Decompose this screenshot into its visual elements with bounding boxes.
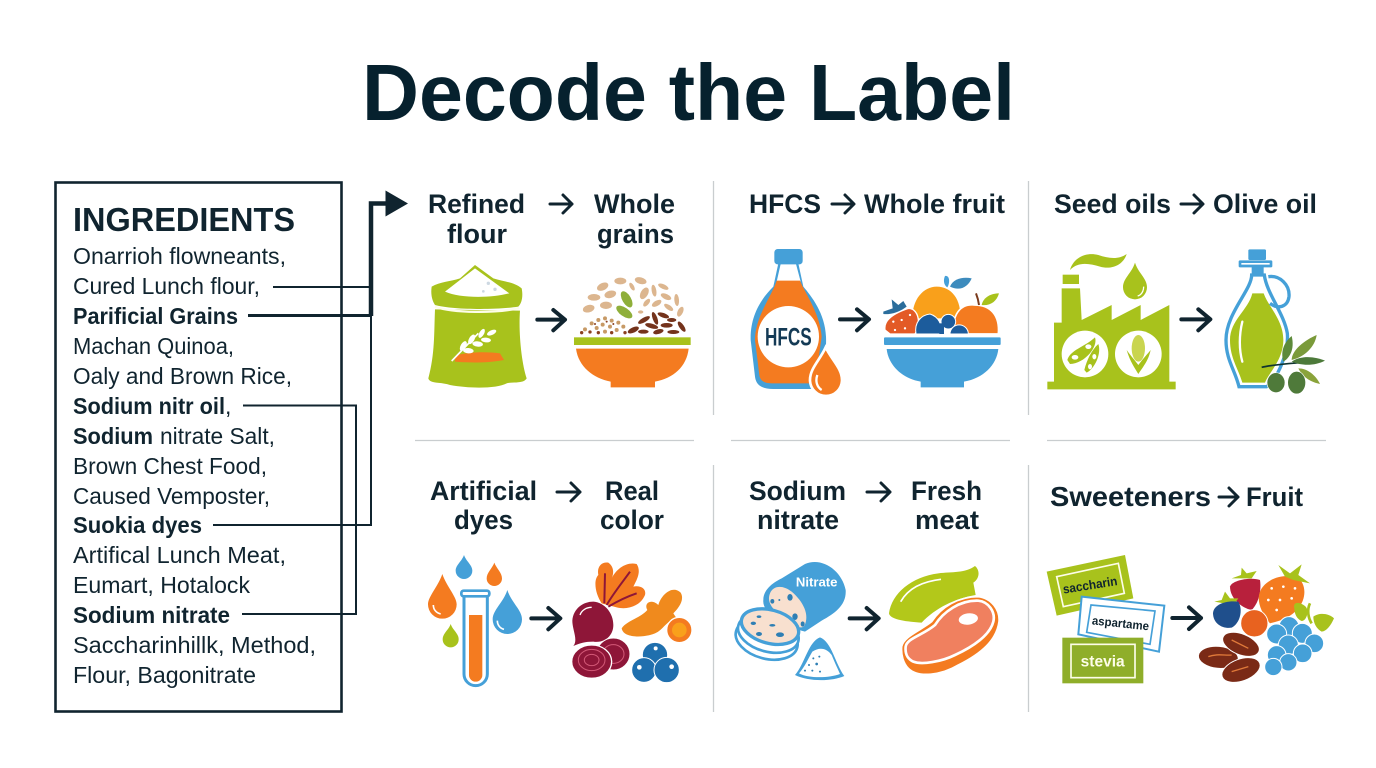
- icons: cured meat, arrow, fresh meat: [731, 562, 999, 680]
- panel: sodium nitrate to fresh meat: [731, 476, 999, 680]
- heading: refined flour to whole grains: [428, 189, 675, 249]
- heading: seed oils to olive oil: Seed oils: [1054, 189, 1171, 219]
- icons: test tube, arrow, natural colors: [428, 555, 692, 686]
- panel: artificial dyes to real color: [428, 476, 692, 686]
- text block: ingredient lines: Sodium nitr oil: [73, 393, 225, 419]
- icon: saccharin packet: [1047, 555, 1133, 616]
- text block: ingredient lines: Machan Quinoa,: [73, 333, 234, 359]
- icon: saccharin packet: saccharin: [1062, 574, 1118, 597]
- arrow: [537, 310, 565, 330]
- text block: ingredient lines: Brown Chest Food,: [73, 453, 267, 479]
- icons: sweetener packets, arrow, fruit pile: [1047, 555, 1334, 687]
- heading: sweeteners to fruit: Fruit: [1246, 482, 1303, 512]
- text block: ingredient lines: Onarrioh flowneants,: [73, 243, 286, 269]
- heading: artificial dyes to real color: color: [600, 505, 664, 535]
- text block: ingredient lines: ,: [225, 393, 231, 419]
- heading: HFCS to whole fruit: Whole fruit: [864, 189, 1005, 219]
- text block: ingredient lines: Sodium: [73, 423, 153, 449]
- panel: HFCS to whole fruit: [749, 189, 1005, 396]
- heading: artificial dyes to real color: [430, 476, 664, 535]
- icon: nitrate cured meat: Nitrate: [796, 576, 837, 590]
- connector lines and arrow from ingredients to swaps: [213, 190, 408, 614]
- text block: ingredient lines: Flour, Bagonitrate: [73, 662, 256, 688]
- icon: stevia packet: [1062, 638, 1143, 683]
- heading: artificial dyes to real color: Real: [605, 476, 659, 506]
- arrow: [840, 309, 869, 330]
- icon: beet, turmeric, blueberries: [572, 563, 692, 683]
- text block: ingredient lines: Parificial Grains: [73, 303, 238, 329]
- heading: sodium nitrate to fresh meat: nitrate: [757, 505, 839, 535]
- icon: aspartame packet: [1078, 597, 1164, 652]
- icon: HFCS syrup bottle: [751, 249, 842, 396]
- arrow: [1181, 309, 1210, 330]
- icon: stevia packet: stevia: [1081, 653, 1125, 670]
- heading: HFCS to whole fruit: [749, 189, 1005, 219]
- panel: refined flour to whole grains: [428, 189, 691, 388]
- heading: sodium nitrate to fresh meat: meat: [915, 505, 979, 535]
- icons: HFCS bottle, arrow, fruit bowl: [751, 249, 1001, 396]
- heading: seed oils to olive oil: [1054, 189, 1317, 219]
- icon: HFCS syrup bottle: HFCS: [765, 323, 812, 351]
- heading: refined flour to whole grains: Refined: [428, 189, 525, 219]
- heading: seed oils to olive oil: Olive oil: [1213, 189, 1317, 219]
- text block: ingredient lines: [73, 243, 316, 688]
- text block: ingredient lines: Sodium nitrate: [73, 602, 230, 628]
- heading: ingredients: INGREDIENTS: [73, 202, 295, 239]
- icon: fruit pile: [1197, 564, 1334, 687]
- heading: artificial dyes to real color: dyes: [454, 505, 513, 535]
- heading: refined flour to whole grains: grains: [597, 219, 674, 249]
- heading: artificial dyes to real color: Artificial: [430, 476, 537, 506]
- title: Decode the Label: [362, 48, 1015, 137]
- heading: sodium nitrate to fresh meat: [749, 476, 982, 535]
- panel: ingredients list: [56, 182, 342, 712]
- icon: nitrate cured meat: [731, 562, 846, 680]
- text block: ingredient lines: Cured Lunch flour,: [73, 273, 260, 299]
- panel: sweeteners to fruit: [1047, 481, 1334, 687]
- heading: HFCS to whole fruit: HFCS: [749, 189, 821, 219]
- text block: ingredient lines: Eumart, Hotalock: [73, 572, 250, 598]
- icon: aspartame packet: aspartame: [1091, 613, 1150, 633]
- arrow: [531, 608, 560, 629]
- icon: test tube with dye drops: [428, 555, 522, 686]
- icon: bowl of fruit: [883, 276, 1001, 387]
- text block: ingredient lines: Caused Vemposter,: [73, 483, 270, 509]
- heading: sweeteners to fruit: [1050, 481, 1303, 512]
- heading: sweeteners to fruit: Sweeteners: [1050, 481, 1211, 512]
- icon: olive oil jar: [1226, 249, 1325, 394]
- arrow: [1172, 607, 1201, 629]
- icons: factory, arrow, olive oil: [1047, 249, 1325, 394]
- text block: ingredient lines: Oaly and Brown Rice,: [73, 363, 292, 389]
- icon: seed oil factory: [1047, 254, 1176, 389]
- heading: refined flour to whole grains: flour: [447, 219, 507, 249]
- text block: ingredient lines: nitrate Salt,: [160, 423, 275, 449]
- panel: seed oils to olive oil: [1047, 189, 1325, 394]
- grid dividers: [415, 181, 1326, 712]
- heading: sodium nitrate to fresh meat: Sodium: [749, 476, 846, 506]
- icons: flour sack, arrow, grain bowl: [428, 265, 691, 388]
- icon: bowl of whole grains: [574, 276, 691, 387]
- icon: fresh meat and green pepper: [889, 566, 999, 674]
- icon: flour sack: [428, 265, 527, 388]
- text block: ingredient lines: Suokia dyes: [73, 512, 202, 538]
- text block: ingredient lines: Artifical Lunch Meat,: [73, 542, 286, 568]
- text block: ingredient lines: Saccharinhillk, Method,: [73, 632, 316, 658]
- heading: refined flour to whole grains: Whole: [594, 189, 675, 219]
- heading: sodium nitrate to fresh meat: Fresh: [911, 476, 982, 506]
- arrow: [850, 608, 879, 629]
